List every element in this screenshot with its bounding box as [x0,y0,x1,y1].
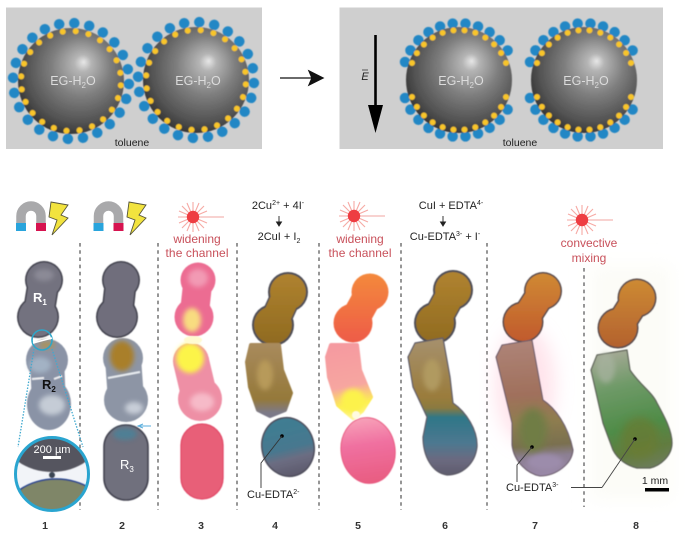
label: R1: R [33,290,42,305]
sphere: left EG-H2O droplet: EG-H [50,74,82,88]
channel 7 droplet [495,272,573,476]
droplet R1 [414,270,473,344]
droplet R3 [337,414,399,487]
droplet R2 [103,338,148,422]
text: convective mixing, step 8: mixing [572,251,606,265]
icon: laser, step 3 [178,202,224,232]
icon: laser, step 8 [567,205,613,235]
scale bar: 1 mm: 1 mm [642,475,668,487]
sphere: left polarised droplet: O [474,74,484,88]
droplet R2 [247,345,291,416]
step numbers: 6 [442,520,448,532]
callout: Cu-EDTA 3-: 3- [552,482,559,489]
text: reaction step 6: Cu-EDTA [410,231,456,243]
zoom indicator ring [32,330,52,350]
step numbers: 3 [198,520,204,532]
callout: Cu-EDTA 2-: Cu-EDTA [247,489,293,501]
step numbers: 7 [532,520,538,532]
sphere: left EG-H2O droplet: 2 [82,81,87,90]
label: R2: R [42,377,51,392]
arrow: electric field E: E [361,71,369,83]
callout: Cu-EDTA 2-: 2- [293,489,300,496]
droplet R2 [173,343,222,421]
text: reaction step 4: 2+ [272,200,280,207]
text: convective mixing, step 8: convective [561,236,618,250]
glow: pink laser halo [495,327,555,443]
droplet R1 [334,274,388,342]
channel 3 droplets [173,262,223,499]
channel 5 droplets [327,274,399,487]
sphere: right polarised droplet: 2 [595,81,600,90]
label: R3: R [120,457,129,472]
icon: laser, step 5 [339,201,385,231]
channel 1 droplets [17,261,71,430]
sphere: right EG-H2O droplet [135,19,257,141]
droplet R2 [327,345,371,418]
sphere: right polarised droplet [530,23,638,137]
droplet R1 [502,272,562,342]
sphere: right polarised droplet: EG-H [563,74,595,88]
sphere: left EG-H2O droplet [10,20,132,142]
inset: magnified junction [14,436,90,512]
callout: Cu-EDTA 3- [506,445,602,494]
label: R1: 1 [42,298,47,307]
icon: magnet and lightning, step 2 [94,202,146,235]
droplet R3 [181,424,223,499]
droplet R1 [96,261,140,338]
droplet R3 [104,425,148,500]
panel: droplets before electric field [6,8,262,149]
channel 8 droplet [591,278,672,468]
channel 6 droplet [408,270,477,475]
text: widening the channel, step 5: widening [335,232,384,246]
zoom guide lines [18,349,83,447]
sphere: left EG-H2O droplet: O [86,74,96,88]
sphere: left polarised droplet [405,23,513,137]
text: reaction step 4: 2CuI + I [258,231,296,243]
droplet R1 [17,261,63,338]
icon: magnet and lightning, step 1 [16,202,68,235]
text: reaction step 6 [410,200,484,243]
sphere: right EG-H2O droplet: EG-H [175,74,207,88]
channel 4 droplets [247,272,320,482]
channel 2 droplets [96,261,148,500]
droplet R3 [256,412,320,482]
droplet R1 [252,272,308,346]
sphere: right EG-H2O droplet: O [211,74,221,88]
droplet R2 and merged R3 [496,340,573,476]
background tint: panel 8 [590,265,672,500]
callout: Cu-EDTA 2- [247,434,300,501]
text: reaction step 4: 2 [296,238,300,245]
text: reaction step 6: - [478,231,481,238]
callout: Cu-EDTA 3-: Cu-EDTA [506,482,552,494]
text: widening the channel, step 3: widening [172,232,221,246]
step numbers: 1 [42,520,48,532]
text: reaction step 6: CuI + EDTA [419,200,477,212]
step numbers: 5 [355,520,361,532]
label: toluene: toluene [503,137,537,149]
step numbers [42,520,639,532]
text: widening the channel, step 3: the channel [166,246,228,260]
label: toluene: toluene [115,137,149,149]
droplet R2 [26,339,71,430]
droplet R2 and merged R3 [408,338,477,475]
text: widening the channel, step 5: the channel [328,246,392,260]
label: R3: 3 [129,465,134,474]
arrow: electric field E [361,35,383,133]
droplet R2 and merged R3 [591,350,672,468]
text: reaction step 6: 4- [477,200,484,207]
scale bar [43,456,61,459]
glow: yellow hotspot [341,389,365,419]
sphere: right polarised droplet: O [599,74,609,88]
arrow: blue junction marker [138,424,151,428]
sphere: right EG-H2O droplet: 2 [207,81,212,90]
droplet R1 [598,278,656,348]
text: reaction step 6: + I [462,231,478,243]
text: reaction step 6: 3- [456,231,463,238]
arrow: transition [280,71,323,85]
text: reaction step 4: - [302,200,305,207]
sphere: left polarised droplet: 2 [470,81,475,90]
text: reaction step 4 [252,200,305,245]
callout line over droplet 8 [602,437,637,488]
text: reaction step 4: + 4I [280,200,302,212]
step numbers: 2 [119,520,125,532]
scale text: 200 um: 200 µm [34,444,70,456]
step numbers: 4 [272,520,278,532]
dashed separators [80,243,584,510]
droplet R1 [174,262,216,336]
label: R2: 2 [51,385,56,394]
text: reaction step 4: 2Cu [252,200,272,212]
panel: droplets under electric field [340,8,663,149]
glow: yellow hotspot [176,308,204,373]
sphere: left polarised droplet: EG-H [438,74,470,88]
step numbers: 8 [633,520,639,532]
